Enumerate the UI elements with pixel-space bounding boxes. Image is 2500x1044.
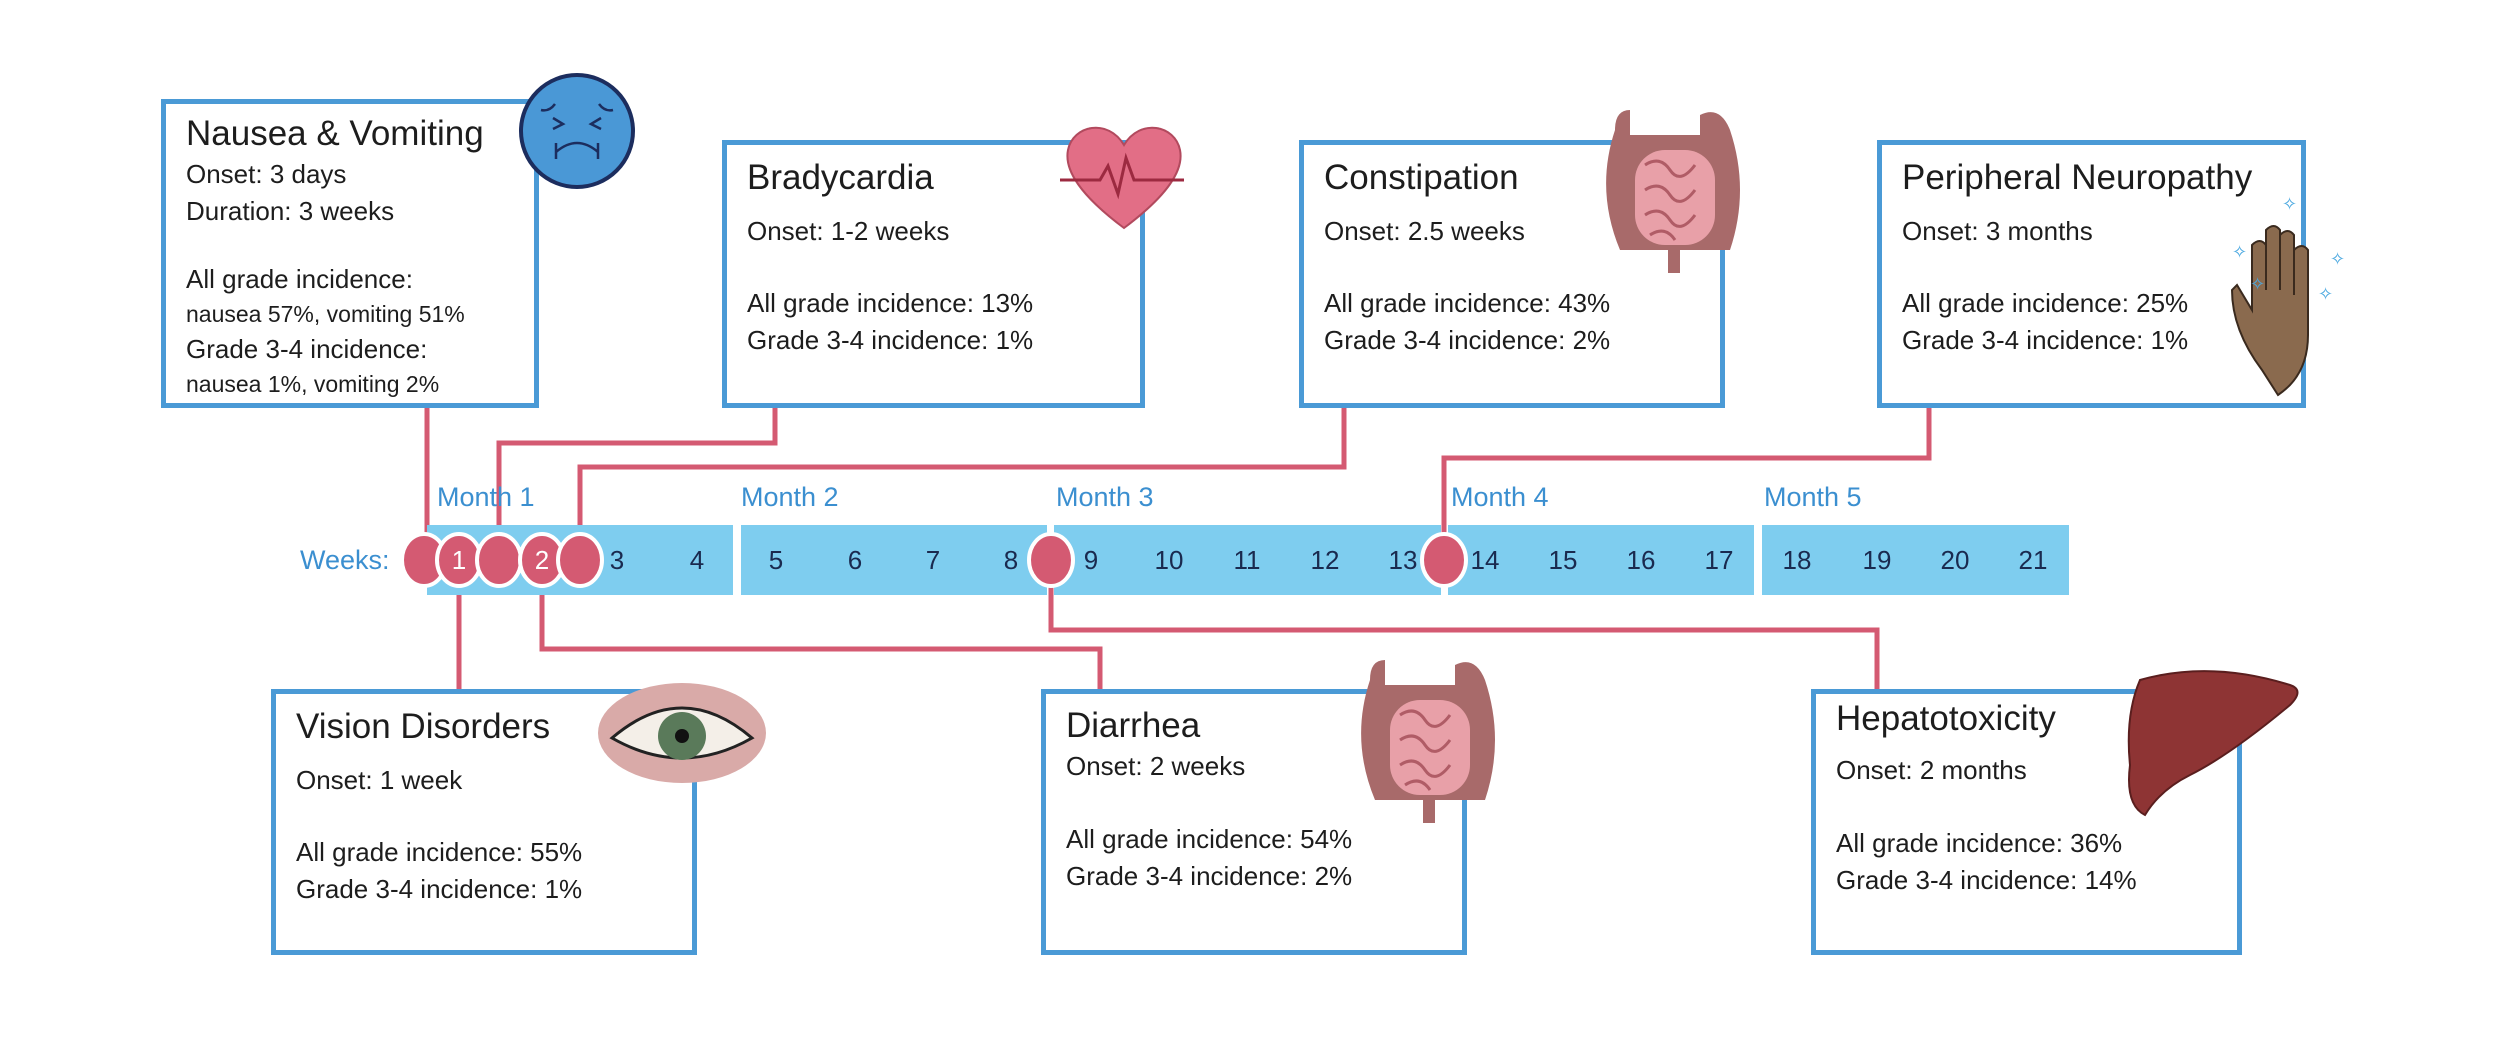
panel: bradycardia bbox=[722, 140, 1145, 408]
icon: heart bbox=[1060, 128, 1184, 228]
panel: peripheral neuropathy: Onset: 3 months bbox=[1902, 216, 2093, 246]
week numbers: 17 bbox=[1705, 545, 1733, 575]
panel: hepatotoxicity: All grade incidence: 36% bbox=[1836, 828, 2122, 858]
icon: hand with sparkles bbox=[2232, 194, 2345, 395]
panel: nausea & vomiting: Grade 3-4 incidence: bbox=[186, 334, 427, 364]
panel: vision disorders: Grade 3-4 incidence: 1% bbox=[296, 874, 582, 904]
panel: vision disorders: All grade incidence: 55% bbox=[296, 837, 582, 867]
icon: liver bbox=[2129, 671, 2298, 815]
week numbers: 13 bbox=[1389, 545, 1417, 575]
week numbers bbox=[610, 545, 2047, 575]
panel: nausea & vomiting: Onset: 3 days bbox=[186, 159, 346, 189]
panel: constipation bbox=[1299, 140, 1725, 408]
panel: bradycardia: Onset: 1-2 weeks bbox=[747, 216, 949, 246]
panel: constipation: Grade 3-4 incidence: 2% bbox=[1324, 325, 1610, 355]
panel: nausea & vomiting: nausea 1%, vomiting 2% bbox=[186, 371, 439, 397]
month labels bbox=[300, 482, 1862, 575]
week numbers: 3 bbox=[610, 545, 624, 575]
panel: hepatotoxicity: Onset: 2 months bbox=[1836, 755, 2027, 785]
panel: diarrhea bbox=[1041, 689, 1467, 955]
panel: vision disorders: Vision Disorders bbox=[296, 707, 550, 746]
icon: hand with sparkles: ✧ bbox=[2232, 242, 2247, 263]
panel: bradycardia: Bradycardia bbox=[747, 158, 934, 197]
panel: constipation: All grade incidence: 43% bbox=[1324, 288, 1610, 318]
icon: hand with sparkles: ✧ bbox=[2318, 284, 2333, 305]
panel: diarrhea: Grade 3-4 incidence: 2% bbox=[1066, 861, 1352, 891]
week numbers: 19 bbox=[1863, 545, 1891, 575]
month labels: Month 5 bbox=[1764, 482, 1862, 512]
panel: nausea & vomiting: Duration: 3 weeks bbox=[186, 196, 394, 226]
panel: hepatotoxicity bbox=[1811, 689, 2242, 955]
icon: nauseous face bbox=[521, 75, 633, 187]
panel: bradycardia: Grade 3-4 incidence: 1% bbox=[747, 325, 1033, 355]
icon: hand with sparkles: ✧ bbox=[2330, 249, 2345, 270]
month labels: Month 4 bbox=[1451, 482, 1549, 512]
week numbers: 15 bbox=[1549, 545, 1577, 575]
timeline bar bbox=[427, 525, 2069, 595]
panel: nausea & vomiting: All grade incidence: bbox=[186, 264, 413, 294]
week numbers: 20 bbox=[1941, 545, 1969, 575]
panel: vision disorders bbox=[271, 689, 697, 955]
week numbers: 7 bbox=[926, 545, 940, 575]
month labels: Weeks: bbox=[300, 545, 390, 575]
week numbers: 8 bbox=[1004, 545, 1018, 575]
week numbers: 12 bbox=[1311, 545, 1339, 575]
week numbers: 16 bbox=[1627, 545, 1655, 575]
icon: intestines (diarrhea) bbox=[1361, 660, 1495, 823]
panel: diarrhea: Onset: 2 weeks bbox=[1066, 751, 1245, 781]
panel: constipation: Constipation bbox=[1324, 158, 1519, 197]
week numbers: 9 bbox=[1084, 545, 1098, 575]
week numbers: 4 bbox=[690, 545, 704, 575]
icon: hand with sparkles: ✧ bbox=[2250, 274, 2265, 295]
timeline connectors and bar: 2 bbox=[535, 545, 549, 575]
panel: nausea & vomiting bbox=[161, 99, 539, 408]
week numbers: 14 bbox=[1471, 545, 1499, 575]
week numbers: 18 bbox=[1783, 545, 1811, 575]
icon: eye bbox=[598, 683, 766, 783]
panel: peripheral neuropathy: Peripheral Neuropathy bbox=[1902, 158, 2252, 197]
month labels: Month 1 bbox=[437, 482, 535, 512]
panel: hepatotoxicity: Grade 3-4 incidence: 14% bbox=[1836, 865, 2137, 895]
week numbers: 6 bbox=[848, 545, 862, 575]
panel: peripheral neuropathy: All grade incidence: 25% bbox=[1902, 288, 2188, 318]
event markers bbox=[402, 534, 1466, 586]
icon: intestines (constipation) bbox=[1606, 110, 1740, 273]
panel: constipation: Onset: 2.5 weeks bbox=[1324, 216, 1525, 246]
panel: diarrhea: Diarrhea bbox=[1066, 706, 1200, 745]
panel: nausea & vomiting: Nausea & Vomiting bbox=[186, 114, 484, 153]
week numbers: 11 bbox=[1234, 545, 1260, 575]
week numbers: 5 bbox=[769, 545, 783, 575]
panel: hepatotoxicity: Hepatotoxicity bbox=[1836, 699, 2056, 738]
week numbers: 21 bbox=[2019, 545, 2047, 575]
week numbers: 10 bbox=[1155, 545, 1183, 575]
panel: diarrhea: All grade incidence: 54% bbox=[1066, 824, 1352, 854]
panel: bradycardia: All grade incidence: 13% bbox=[747, 288, 1033, 318]
icon: hand with sparkles: ✧ bbox=[2282, 194, 2297, 215]
panel: nausea & vomiting: nausea 57%, vomiting 51% bbox=[186, 301, 465, 327]
panel: vision disorders: Onset: 1 week bbox=[296, 765, 462, 795]
timeline connectors and bar: 1 bbox=[452, 545, 466, 575]
month labels: Month 2 bbox=[741, 482, 839, 512]
panel: peripheral neuropathy: Grade 3-4 incidence: 1% bbox=[1902, 325, 2188, 355]
month labels: Month 3 bbox=[1056, 482, 1154, 512]
panel: peripheral neuropathy bbox=[1877, 140, 2306, 408]
